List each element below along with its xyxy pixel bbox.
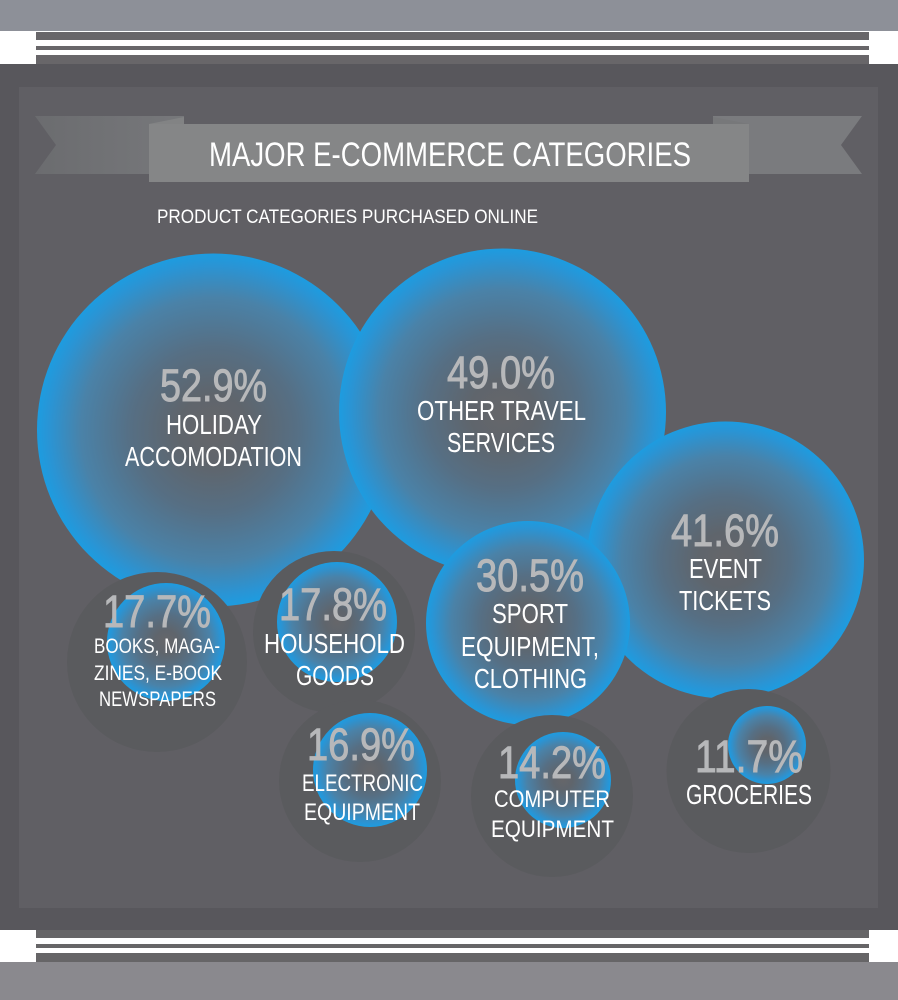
bubble: other travel services — [339, 248, 666, 576]
bubble: books, magazines — [67, 572, 247, 752]
title: MAJOR E-COMMERCE CATEGORIES — [209, 136, 691, 174]
bubble: event tickets — [587, 422, 864, 698]
bubble: computer equipment: 14.2% — [498, 737, 606, 788]
bubble: books, magazines: BOOKS, MAGA- — [94, 635, 220, 658]
bubble: electronic equipment: EQUIPMENT — [304, 799, 420, 826]
bubble: other travel services: OTHER TRAVEL — [417, 395, 586, 426]
bubble: electronic equipment — [279, 700, 441, 862]
bubble: groceries — [666, 689, 830, 853]
bubble: holiday accomodation: ACCOMODATION — [125, 441, 302, 472]
bubble: books, magazines: 17.7% — [103, 586, 211, 637]
bubble: household goods: 17.8% — [279, 579, 387, 630]
bubble: sport equipment, clothing: 30.5% — [476, 550, 584, 601]
bubble: computer equipment: COMPUTER — [494, 786, 610, 813]
subtitle: PRODUCT CATEGORIES PURCHASED ONLINE — [157, 207, 538, 228]
bubble: groceries: 11.7% — [695, 731, 803, 782]
bubble: event tickets: TICKETS — [679, 585, 771, 616]
bubble: household goods — [253, 551, 415, 713]
bubble: event tickets: 41.6% — [671, 505, 779, 556]
bubble: event tickets: EVENT — [689, 553, 762, 584]
bubble: household goods: HOUSEHOLD — [264, 628, 405, 659]
bubble: household goods: GOODS — [296, 660, 374, 691]
bubble: other travel services: SERVICES — [447, 427, 555, 458]
bubble: holiday accomodation: HOLIDAY — [166, 409, 262, 440]
title ribbon — [35, 116, 862, 182]
bubble: sport equipment, clothing — [426, 521, 630, 725]
top bar — [0, 0, 898, 64]
bottom bar — [0, 930, 898, 1000]
bubble: electronic equipment: ELECTRONIC — [302, 770, 423, 797]
bubble: sport equipment, clothing: EQUIPMENT, — [461, 631, 599, 662]
bubble: sport equipment, clothing: SPORT — [492, 598, 568, 629]
bubble: other travel services: 49.0% — [447, 347, 555, 398]
bubble: electronic equipment: 16.9% — [307, 719, 415, 770]
bubble: groceries: GROCERIES — [686, 779, 812, 810]
bubble: holiday accomodation — [37, 254, 390, 606]
bubble: computer equipment: EQUIPMENT — [491, 816, 614, 843]
bubble: books, magazines: ZINES, E-BOOK — [94, 662, 222, 685]
bubble: books, magazines: NEWSPAPERS — [99, 688, 216, 711]
bubble: holiday accomodation: 52.9% — [160, 360, 267, 411]
bubble: computer equipment — [471, 715, 633, 877]
bubble: sport equipment, clothing: CLOTHING — [474, 663, 587, 694]
